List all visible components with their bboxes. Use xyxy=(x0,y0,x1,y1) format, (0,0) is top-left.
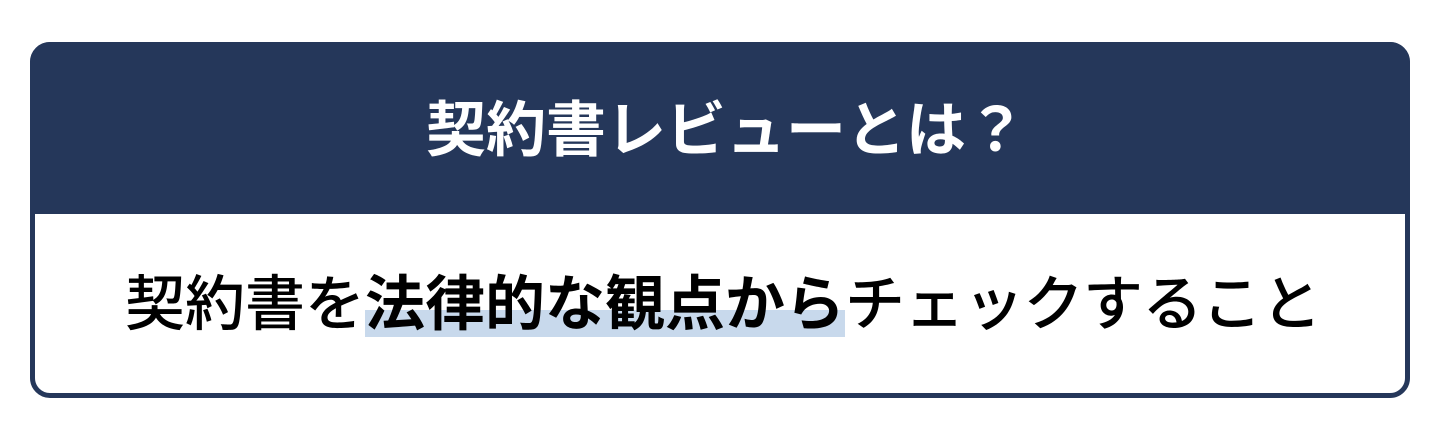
heading band xyxy=(30,42,1410,214)
title: 契約書レビューとは？ xyxy=(426,97,1026,164)
highlight marker xyxy=(365,310,845,337)
sentence: 契約書を法律的な観点からチェックすること xyxy=(125,271,1321,338)
panel: definition card xyxy=(30,42,1410,398)
definition text xyxy=(125,271,1321,338)
